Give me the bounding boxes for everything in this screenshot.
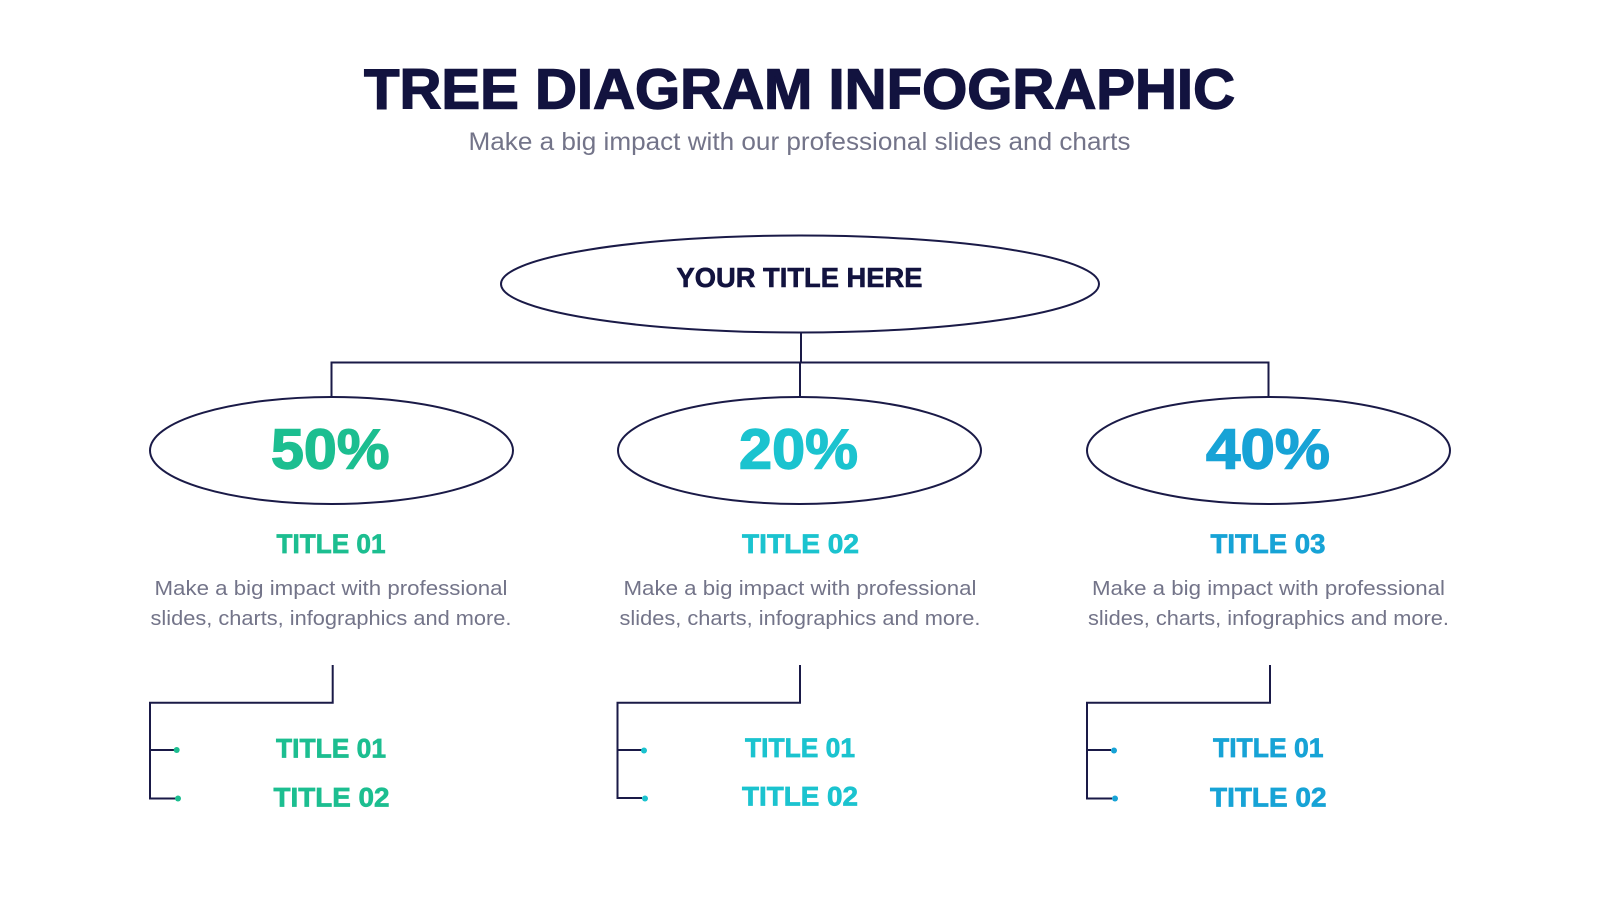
- connector: root to three branches: [332, 332, 1268, 397]
- percentage node 50%: [150, 397, 513, 504]
- description text: [150, 577, 512, 630]
- panel: branch 2: [618, 397, 981, 812]
- subtitle: Make a big impact with our professional slides and charts: [468, 128, 1130, 156]
- description text: slides, charts, infographics and more.: [150, 607, 512, 630]
- sub-tree connector with dots: [150, 665, 333, 802]
- percentage node 40%: [1087, 397, 1450, 504]
- sub-item: title 01: TITLE 01: [1213, 733, 1324, 763]
- sub-item: title 01: TITLE 01: [276, 734, 386, 764]
- description text: slides, charts, infographics and more.: [1088, 607, 1449, 630]
- sub-item: title 02: TITLE 02: [742, 782, 858, 812]
- root node: your title here: [501, 236, 1099, 332]
- sub-item: title 02: TITLE 02: [1210, 782, 1326, 812]
- description text: Make a big impact with professional: [1092, 577, 1445, 600]
- heading: title 03: TITLE 03: [1210, 529, 1326, 559]
- percentage node 50%: 50%: [271, 418, 390, 482]
- description text: slides, charts, infographics and more.: [620, 607, 980, 630]
- title: TREE DIAGRAM INFOGRAPHIC: [364, 58, 1235, 122]
- percentage node 20%: 20%: [739, 418, 858, 482]
- description text: [620, 577, 980, 630]
- panel: branch 3: [1087, 397, 1450, 812]
- percentage node 20%: [618, 397, 981, 504]
- sub-tree connector with dots: [618, 665, 800, 802]
- root node: your title here: YOUR TITLE HERE: [676, 262, 922, 293]
- sub-item: title 02: TITLE 02: [274, 782, 390, 812]
- percentage node 40%: 40%: [1206, 418, 1330, 482]
- sub-item: title 01: TITLE 01: [745, 733, 855, 763]
- heading: title 02: TITLE 02: [742, 529, 859, 559]
- panel: branch 1: [150, 397, 513, 812]
- description text: [1088, 577, 1449, 630]
- heading: title 01: TITLE 01: [276, 529, 386, 559]
- description text: Make a big impact with professional: [154, 577, 508, 600]
- sub-tree connector with dots: [1087, 665, 1270, 802]
- description text: Make a big impact with professional: [624, 577, 976, 600]
